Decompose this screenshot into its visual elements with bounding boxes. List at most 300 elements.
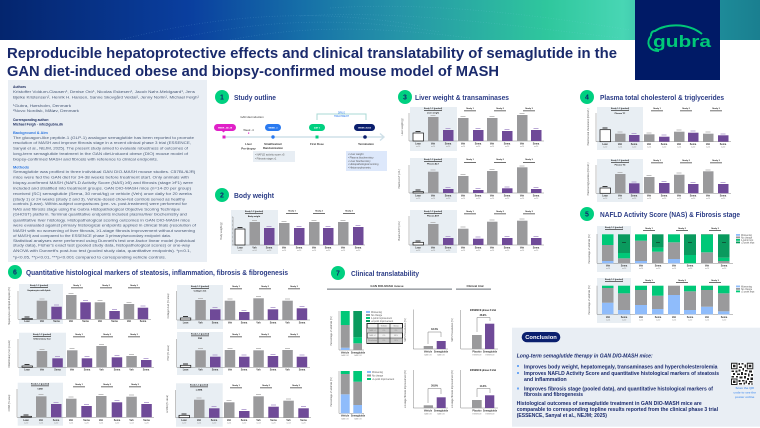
bar chart: alpha-SMA: n=14 — [286, 422, 291, 424]
endpoints box: • Liver biochemistry — [348, 159, 371, 163]
bar chart: plasma AST: Sema — [445, 246, 452, 250]
methods: *p<0.05, **p<0.01, ***p<0.001 compared to corresponding vehicle controls. — [13, 254, 166, 259]
bar chart: CD68: Veh — [69, 419, 74, 422]
inclusion criteria box — [253, 151, 295, 162]
bar chart: hepatocytes with lipid droplets: Study 1-3 (pooled) — [30, 284, 48, 287]
conclusion summary: comparable to corresponding topline results reported from the clinical phase 3 trial — [517, 407, 719, 413]
bar chart: total cholesterol: n=20 — [691, 146, 695, 148]
badge 2: 2 — [220, 192, 224, 200]
bar chart: inflammatory foci: Sema — [143, 368, 150, 372]
bar chart: triglycerides: Study 1 — [653, 159, 662, 162]
bar chart: triglycerides: Sema — [720, 194, 727, 198]
bar chart: inflammatory foci: Veh — [70, 368, 75, 372]
timeline diagram: First Dose — [310, 142, 324, 146]
stacked bar chart: NAS: Sema — [687, 264, 694, 268]
bar chart: hepatocytes with lipid droplets: Veh — [98, 320, 103, 323]
stacked bar chart: NAS mouse: GAN DIO — [341, 354, 350, 357]
bar chart: CD68: n=14 — [129, 422, 134, 424]
column header: GAN DIO-MASH mouse — [327, 284, 452, 290]
badge 5 — [580, 207, 594, 221]
stacked bar chart: NAS mouse: Vehicle — [341, 352, 350, 354]
bar chart: alpha-SMA: n=14 — [227, 422, 231, 424]
stacked bar chart: fibrosis stage: n=20 — [722, 320, 726, 322]
bar chart: total cholesterol: Veh — [677, 143, 682, 146]
bar chart: plasma ALT: Veh — [431, 194, 436, 198]
methods — [13, 164, 197, 259]
bar chart: plasma AST: Sema — [504, 246, 511, 250]
bar chart: plasma AST: Plasma AST (U/L) — [398, 221, 401, 241]
stacked bar chart: NAS: Veh — [639, 264, 644, 268]
panel: authors and abstract — [8, 80, 207, 262]
bar chart: alpha-SMA: n=20 — [301, 422, 306, 424]
bar chart: body weight: Veh — [282, 246, 287, 250]
bar chart: total cholesterol: n=14 — [677, 146, 681, 148]
legend: fibrosis stage — [736, 285, 755, 293]
legend: NAS: Worsening — [741, 234, 753, 237]
bar chart: ESSENCE fibrosis improvement: ≥1-stage fibrosis improvement (%) — [451, 370, 454, 408]
bar chart: alpha-SMA: n=10 — [182, 422, 186, 424]
bar chart: plasma AST — [398, 210, 544, 253]
QR caption: code to see the — [733, 391, 756, 395]
endpoints box: • Liver weight — [348, 152, 364, 156]
bar chart: CD68: Study 2 — [103, 383, 112, 386]
bar chart: plasma AST: n=10 — [416, 250, 420, 252]
bar chart: triglycerides: Sema — [690, 194, 697, 198]
bar chart: plasma ALT: n=14 — [431, 198, 435, 200]
bar chart: triglycerides: n=14 — [677, 198, 681, 200]
bar chart: plasma ALT: Veh — [461, 194, 466, 198]
bar chart: alpha-SMA: Sema — [300, 419, 307, 422]
methods: Statistical analyses were performed using Dunnett's test one-factor linear model (individual — [13, 238, 195, 243]
bar chart: hepatocytes with lipid droplets: Sema — [111, 320, 118, 323]
bar chart: mouse MASH resolution: Vehicle — [424, 351, 433, 354]
stacked bar chart: NAS: **** — [722, 242, 726, 245]
bar chart: mouse MASH resolution: 18.4% — [431, 328, 439, 331]
bar chart: plasma ALT: Sema — [504, 194, 511, 198]
title — [7, 45, 617, 80]
conclusion bullets: and inflammation — [524, 377, 567, 383]
bar chart: liver weight: n=10 — [416, 146, 420, 148]
bar chart: plasma ALT: n=14 — [461, 198, 465, 200]
bar chart: total cholesterol: Study 1 — [653, 107, 662, 110]
bar chart: collagen 1a1: Veh — [256, 322, 261, 324]
bar chart: CD68: CD68 — [37, 388, 43, 390]
authors — [13, 85, 200, 126]
bar chart: CD68: Sema — [114, 419, 121, 422]
bar chart: plasma ALT: n=20 — [476, 198, 480, 200]
bar chart: hepatocytes with lipid droplets: Veh — [127, 320, 132, 323]
bar chart: plasma AST: Plasma AST — [427, 214, 440, 218]
panel 2: body weight — [215, 188, 365, 254]
timeline diagram — [214, 112, 384, 150]
bar chart: plasma ALT: Sema — [533, 194, 540, 198]
bar chart: plasma ALT: n=14 — [490, 198, 494, 200]
bar chart: triglycerides: Veh — [647, 194, 652, 198]
bar chart: plasma ALT: Veh — [520, 194, 525, 198]
methods: NAS and fibrosis stage using the Gubra Histopathological Objective Scoring Technique — [13, 207, 180, 212]
timeline diagram: WEEK -1 — [268, 128, 278, 130]
bar chart: alpha-SMA: Sema — [270, 419, 277, 422]
stacked bar chart: NAS: Veh — [606, 264, 611, 268]
bar chart: triglycerides: Sema — [661, 194, 668, 198]
timeline diagram: Week -4 — [243, 128, 254, 132]
timeline diagram: Stratification/ — [264, 142, 282, 146]
bar chart: plasma AST: Sema — [475, 246, 482, 250]
bar chart: triglycerides: Veh — [706, 194, 711, 198]
bar chart: alpha-SMA: n=20 — [242, 422, 246, 424]
bar chart: alpha-SMA: n=14 — [256, 422, 261, 424]
bar chart: PSR: Lean — [183, 368, 189, 372]
bar chart: hepatocytes with lipid droplets: Lean — [24, 320, 30, 323]
bar chart: ESSENCE fibrosis improvement — [451, 369, 498, 416]
bar chart: CD68: n=14 — [69, 422, 73, 424]
methods: controls (Lean). Within-subject comparisons (pre- vs. post-treatment) were performed for — [13, 201, 188, 206]
bar chart: alpha-SMA: Sema — [211, 419, 218, 422]
stacked bar chart: fibrosis stage: Study 1 — [645, 279, 654, 282]
bar chart: CD68 — [8, 382, 154, 426]
timeline diagram: Termination — [358, 142, 374, 146]
bar chart: plasma AST: Sema — [533, 246, 540, 250]
methods: (study 1) or 24 weeks (study 2 and 3). Vehicle-dosed chow-fed controls served as healthy — [13, 196, 185, 201]
bar chart: CD68: Sema — [143, 419, 150, 422]
bar chart: alpha-SMA: Study 2 — [262, 384, 271, 387]
bar chart: collagen 1a1: Study 1 — [232, 285, 241, 288]
bar chart: inflammatory foci: Study 3 — [130, 333, 139, 336]
legend: fibrosis mouse — [367, 371, 395, 381]
bar chart: inflammatory foci: Study 1-3 (pooled) — [33, 333, 51, 336]
bar chart: plasma ALT: n=14 — [520, 198, 524, 200]
bar chart: plasma AST: Lean — [415, 246, 421, 250]
bar chart: plasma ALT: Study 3 — [525, 158, 534, 161]
methods: biopsy-confirmed MASH (NAFLD Activity Score (NAS) ≥5) and fibrosis (stage ≥F1) were — [13, 180, 193, 185]
stacked bar chart: fibrosis stage: n=14 — [672, 320, 676, 322]
stacked bar chart: fibrosis stage: Veh — [639, 316, 644, 319]
bar chart: plasma AST: n=20 — [505, 250, 509, 252]
legend: NAS mouse: ≥2-point improvement — [371, 320, 394, 323]
panel 5: NAS and fibrosis stage — [580, 207, 755, 323]
badge 6 — [8, 265, 22, 279]
stacked bar chart: NAS: Percentage of animals (%) — [588, 234, 591, 264]
bar chart: total cholesterol: Sema — [720, 143, 727, 146]
stacked bar chart: NAS: Study 1-3 (pooled) — [605, 226, 623, 229]
conclusion bullets: Improves fibrosis stage (pooled data), and quantitative histological markers of — [524, 386, 713, 392]
bar chart: ESSENCE MASH resolution: Semaglutide — [483, 351, 498, 354]
bar chart: hepatocytes with lipid droplets: Sema — [82, 320, 89, 323]
bar chart: CD68: Sema — [83, 419, 90, 422]
panel 6: quantitative histological markers — [8, 265, 311, 427]
bar chart: body weight: n=14 — [282, 250, 286, 252]
background and aim: long-term semaglutide treatment in the GAN diet-induced obese (DIO) mouse model of — [13, 151, 189, 156]
bar chart: plasma ALT: Study 1 — [466, 158, 475, 161]
bar chart: collagen 1a1: Veh — [228, 322, 233, 324]
bar chart: PSR: Sema — [299, 368, 306, 372]
bar chart: collagen 1a1: Veh — [285, 322, 290, 324]
stacked bar chart: fibrosis stage: n=20 — [656, 320, 660, 322]
stacked bar chart: NAS: n=14 — [606, 268, 610, 270]
bar chart: total cholesterol: Study 2 — [682, 107, 691, 110]
bar chart: alpha-SMA: Veh — [286, 419, 291, 422]
legend: fibrosis mouse: No change — [372, 376, 384, 378]
authors: Corresponding author: — [13, 118, 49, 122]
bar chart: liver weight: Sema — [504, 142, 511, 146]
bar chart: body weight: n=14 — [312, 250, 316, 252]
heading: liver weight and transaminases: Liver weight & transaminases — [415, 93, 509, 102]
table: responder rates: 8% — [395, 330, 398, 332]
endpoints box: • Histomorphometry — [348, 166, 372, 170]
bar chart: plasma ALT: Sema — [445, 194, 452, 198]
bar chart: mouse fibrosis improvement: GAN DIO — [424, 412, 433, 416]
QR caption: Scan the QR — [735, 386, 755, 390]
stacked bar chart: NAS: n=14 — [639, 268, 643, 270]
bar chart: body weight: Sema — [325, 246, 332, 250]
timeline diagram: TREATMENT — [334, 115, 350, 118]
bar chart: liver weight: Study 1 — [466, 107, 475, 110]
background and aim: Background & Aim — [13, 130, 48, 135]
bar chart: body weight: Study 1 — [288, 210, 297, 212]
legend: NAS mouse: No change — [371, 315, 383, 317]
bar chart: triglycerides: n=20 — [691, 198, 695, 200]
stacked bar chart: NAS: n=20 — [622, 268, 626, 270]
badge 7: 7 — [336, 270, 340, 278]
bar chart: body weight: Body weight — [248, 215, 260, 218]
bar chart: mouse fibrosis improvement: Vehicle — [424, 410, 433, 412]
bar chart: ESSENCE MASH resolution — [451, 309, 498, 356]
bar chart: mouse fibrosis improvement: ≥1-stage fibrosis improvement (%) — [404, 370, 407, 408]
stacked bar chart: NAS: **** — [688, 242, 692, 245]
bar chart: ESSENCE fibrosis improvement: ESSENCE phase 3 trial — [470, 369, 496, 372]
bar chart: PSR: Veh — [228, 368, 233, 372]
stacked bar chart: NAS mouse — [330, 311, 366, 357]
bar chart: CD68: n=20 — [115, 422, 119, 424]
bar chart: collagen 1a1: Sema — [212, 322, 219, 324]
bar chart: collagen 1a1: Lean — [183, 322, 189, 324]
panel: conclusion — [512, 328, 760, 427]
timeline diagram: DAY 1 — [314, 127, 321, 130]
bar chart: body weight: n=20 — [297, 250, 301, 252]
bar chart: mouse fibrosis improvement: 26.8% — [431, 384, 439, 388]
badge 3 — [398, 90, 412, 104]
legend: NAS: 1-point impr. — [741, 239, 754, 242]
bar chart: liver weight: Study 2 — [496, 107, 505, 110]
stacked bar chart: NAS: **** — [656, 242, 660, 245]
bar chart: plasma ALT: n=20 — [534, 198, 538, 200]
methods: quantitative liver histology. Histopathological scoring outcomes in GAN DIO-MASH mice — [13, 218, 190, 223]
bar chart: body weight: Lean — [237, 246, 243, 250]
table: responder rates: Resolution — [368, 339, 377, 342]
authors: Michael Feigh · mfe@gubra.dk — [13, 122, 63, 126]
column header: clinical trial — [456, 284, 491, 290]
methods: Semaglutide was profiled in three individual GAN DIO-MASH mouse studies. C57BL/6JRj — [13, 169, 195, 174]
conclusion lead: Long-term semaglutide therapy in GAN DIO-MASH mice: — [517, 354, 653, 360]
timeline diagram: Randomization — [263, 146, 283, 150]
logo: gubra: gubra — [653, 32, 712, 51]
bar chart: triglycerides: Lean — [602, 194, 608, 198]
heading: study outline: Study outline — [234, 93, 276, 102]
conclusion summary — [517, 401, 719, 419]
bar chart: CD68: n=14 — [39, 422, 43, 424]
legend: fibrosis stage: Worsening — [741, 285, 753, 288]
bar chart: plasma AST: n=14 — [520, 250, 524, 252]
bar chart: plasma ALT: Veh — [490, 194, 495, 198]
badge 4 — [580, 90, 594, 104]
authors: ²Novo Nordisk, Måløv, Denmark — [13, 108, 79, 113]
bar chart: liver weight: n=14 — [431, 146, 435, 148]
bar chart: ESSENCE MASH resolution: ESSENCE — [472, 354, 482, 356]
bar chart: triglycerides — [587, 159, 731, 202]
bar chart: collagen 1a1: Sema — [299, 322, 306, 324]
stacked bar chart: fibrosis mouse: Semaglutide — [351, 415, 366, 418]
conclusion bullets: Improves body weight, hepatomegaly, transaminases and hypercholesterolemia — [524, 364, 718, 370]
stacked bar chart: NAS — [588, 226, 733, 272]
bar chart: liver weight: Sema — [533, 142, 540, 146]
conclusion pill: Conclusion — [525, 335, 557, 341]
bar chart: body weight: Sema — [355, 246, 362, 250]
heading: quantitative histological markers: Quantitative histological markers of steatosis, inflammation, fibrosis & fibrogenesis — [26, 268, 288, 277]
bar chart: total cholesterol: Sema — [661, 143, 668, 146]
column header: GAN DIO-MASH mouse: GAN DIO-MASH mouse — [370, 284, 404, 288]
bar chart: total cholesterol: n=14 — [706, 146, 710, 148]
bar chart: total cholesterol: n=14 — [647, 146, 651, 148]
bar chart: plasma AST: n=20 — [534, 250, 538, 252]
bar chart: alpha-SMA: Veh — [227, 419, 232, 422]
bar chart: body weight: Veh — [312, 246, 317, 250]
bar chart: triglycerides: Study 1-3 (pooled) — [611, 159, 629, 162]
stacked bar chart: NAS mouse: GAN DIO — [354, 354, 363, 357]
table: responder rates: NAS ≥2 — [369, 334, 376, 337]
background and aim — [13, 130, 194, 161]
endpoints box: • Histopathological scoring — [348, 162, 379, 166]
bar chart: alpha-SMA: Lean — [181, 419, 187, 422]
legend: NAS mouse — [366, 311, 394, 323]
bar chart: body weight: Body weight (g) — [220, 222, 223, 240]
bar chart: triglycerides: Plasma TG — [615, 164, 626, 166]
bar chart: triglycerides: Study 2 — [682, 159, 691, 162]
bar chart: collagen 1a1 — [167, 285, 310, 329]
bar chart: total cholesterol: Sema — [631, 143, 638, 146]
bar chart: triglycerides: Sema — [631, 194, 638, 198]
stacked bar chart: NAS: Study 1 — [645, 227, 654, 230]
bar chart: body weight: Sema — [266, 246, 273, 250]
bar chart: body weight: n=20 — [356, 250, 360, 252]
bar chart: body weight: Veh — [341, 246, 346, 250]
stacked bar chart: fibrosis stage: Veh — [606, 316, 611, 319]
column header: clinical trial: Clinical trial — [466, 284, 484, 288]
stacked bar chart: fibrosis stage — [588, 278, 733, 323]
bar chart: alpha-SMA: Study 1 — [232, 384, 241, 387]
bar chart: alpha-SMA: Veh — [256, 419, 261, 422]
conclusion summary: Histological outcomes of semaglutide treatment in GAN DIO-MASH mice are — [517, 401, 702, 407]
bar chart: plasma ALT: n=20 — [446, 198, 450, 200]
bar chart: triglycerides: Veh — [618, 194, 623, 198]
bar chart: alpha-SMA: Study 1-3 (pooled) — [190, 384, 208, 386]
stacked bar chart: fibrosis stage: n=20 — [688, 320, 692, 322]
bar chart: liver weight: Liver weight (g) — [401, 118, 404, 136]
bar chart: mouse MASH resolution: GAN DIO — [437, 354, 446, 356]
bar chart: PSR — [167, 332, 310, 375]
bar chart: PSR: Veh — [285, 368, 290, 372]
bar chart: plasma AST: Study 1 — [466, 210, 475, 213]
bar chart: CD68: n=10 — [24, 422, 28, 424]
stacked bar chart: fibrosis mouse: GAN DIO — [354, 418, 363, 420]
bar chart: hepatocytes with lipid droplets: Hepatocytes with lipid droplets (%) — [8, 287, 11, 325]
bar chart: plasma ALT: Plasma ALT — [427, 162, 440, 166]
bar chart: CD68: Veh — [99, 419, 104, 422]
bar chart: body weight: n=20 — [267, 250, 271, 252]
bar chart: total cholesterol: Sema — [690, 143, 697, 146]
bar chart: hepatocytes with lipid droplets — [8, 284, 151, 325]
bar chart: CD68: CD68 (% area) — [8, 395, 11, 411]
methods: MASH with no worsening of liver fibrosis, ≥1-stage fibrosis improvement without worsening — [13, 228, 195, 233]
bar chart: plasma ALT: Plasma ALT (U/L) — [398, 169, 401, 189]
bar chart: CD68: Sema — [53, 419, 60, 422]
bar chart: mouse MASH resolution: Semaglutide — [434, 351, 449, 354]
bar chart: total cholesterol: n=20 — [662, 146, 666, 148]
bar chart: body weight: n=20 — [326, 250, 330, 252]
legend: NAS: ≥2-point impr. — [741, 241, 755, 244]
bar chart: liver weight: Sema — [475, 142, 482, 146]
bar chart: body weight: Study 3 — [345, 210, 354, 212]
background and aim: The glucagon-like peptide-1 (GLP-1) analogue semaglutide has been reported to promote — [13, 135, 194, 140]
bar chart: ESSENCE fibrosis improvement: 14.4% — [480, 385, 487, 388]
bar chart: inflammatory foci: Veh — [40, 368, 45, 372]
bar chart: alpha-SMA: n=20 — [271, 422, 276, 424]
bar chart: liver weight: Veh — [520, 142, 525, 146]
bar chart: plasma AST: Study 3 — [525, 210, 534, 213]
bar chart: hepatocytes with lipid droplets: Study 1 — [73, 284, 82, 287]
bar chart: triglycerides: n=10 — [603, 198, 607, 200]
bar chart: PSR: Study 3 — [290, 333, 299, 336]
bar chart: ESSENCE MASH resolution: Placebo — [472, 351, 482, 354]
bar chart: body weight: Study 1-3 (pooled) — [245, 210, 263, 213]
bar chart: hepatocytes with lipid droplets: Hepatocytes with lipids — [27, 289, 51, 292]
bar chart: liver weight: n=20 — [446, 146, 450, 148]
bar chart: CD68: Study 3 — [131, 383, 140, 386]
bar chart: inflammatory foci: Veh — [99, 368, 104, 372]
bar chart: ESSENCE MASH resolution: MASH resolution (%) — [451, 318, 454, 342]
bar chart: collagen 1a1: Study 2 — [261, 285, 270, 288]
bar chart: alpha-SMA: Study 3 — [292, 384, 301, 387]
badge 1 — [215, 90, 229, 104]
bar chart: plasma AST: n=20 — [446, 250, 450, 252]
bar chart: liver weight: Veh — [490, 142, 495, 146]
stacked bar chart: fibrosis stage: n=20 — [622, 320, 626, 322]
background and aim: Sanyal et al., NEJM, 2025). The present study aimed to evaluate robustness of outcomes of — [13, 146, 189, 150]
legend: NAS — [736, 234, 755, 244]
bar chart: body weight: Veh — [252, 246, 257, 250]
bar chart: plasma ALT: n=10 — [416, 198, 420, 200]
bar chart: total cholesterol: n=20 — [721, 146, 725, 148]
bar chart: plasma ALT: Lean — [415, 194, 421, 198]
QR caption: poster online — [735, 395, 755, 399]
badge 3: 3 — [403, 94, 407, 102]
bar chart: collagen 1a1: Collagen 1a1 (% area) — [167, 293, 170, 319]
timeline diagram: Liver — [245, 142, 253, 146]
bar chart: inflammatory foci — [8, 333, 154, 376]
bar chart: liver weight: Study 1-3 (pooled) — [424, 107, 442, 110]
stacked bar chart: NAS: n=14 — [705, 268, 709, 270]
bar chart: liver weight: Veh — [461, 142, 466, 146]
bar chart: plasma AST: Study 2 — [496, 210, 505, 213]
bar chart: triglycerides: n=14 — [618, 198, 622, 200]
methods: study data), Fisher's exact test (pooled study data, histopathological scores) or one-way — [13, 243, 190, 248]
bar chart: liver weight: n=20 — [476, 146, 480, 148]
authors: ¹Gubra, Hørsholm, Denmark — [13, 103, 71, 108]
panel 3: liver weight and transaminases — [398, 90, 544, 253]
bar chart: plasma AST: Veh — [461, 246, 466, 250]
stacked bar chart: fibrosis stage: Study 3 — [711, 279, 720, 282]
bar chart: total cholesterol: n=20 — [632, 146, 636, 148]
bar chart: ESSENCE fibrosis improvement: ESSENCE — [485, 414, 495, 416]
